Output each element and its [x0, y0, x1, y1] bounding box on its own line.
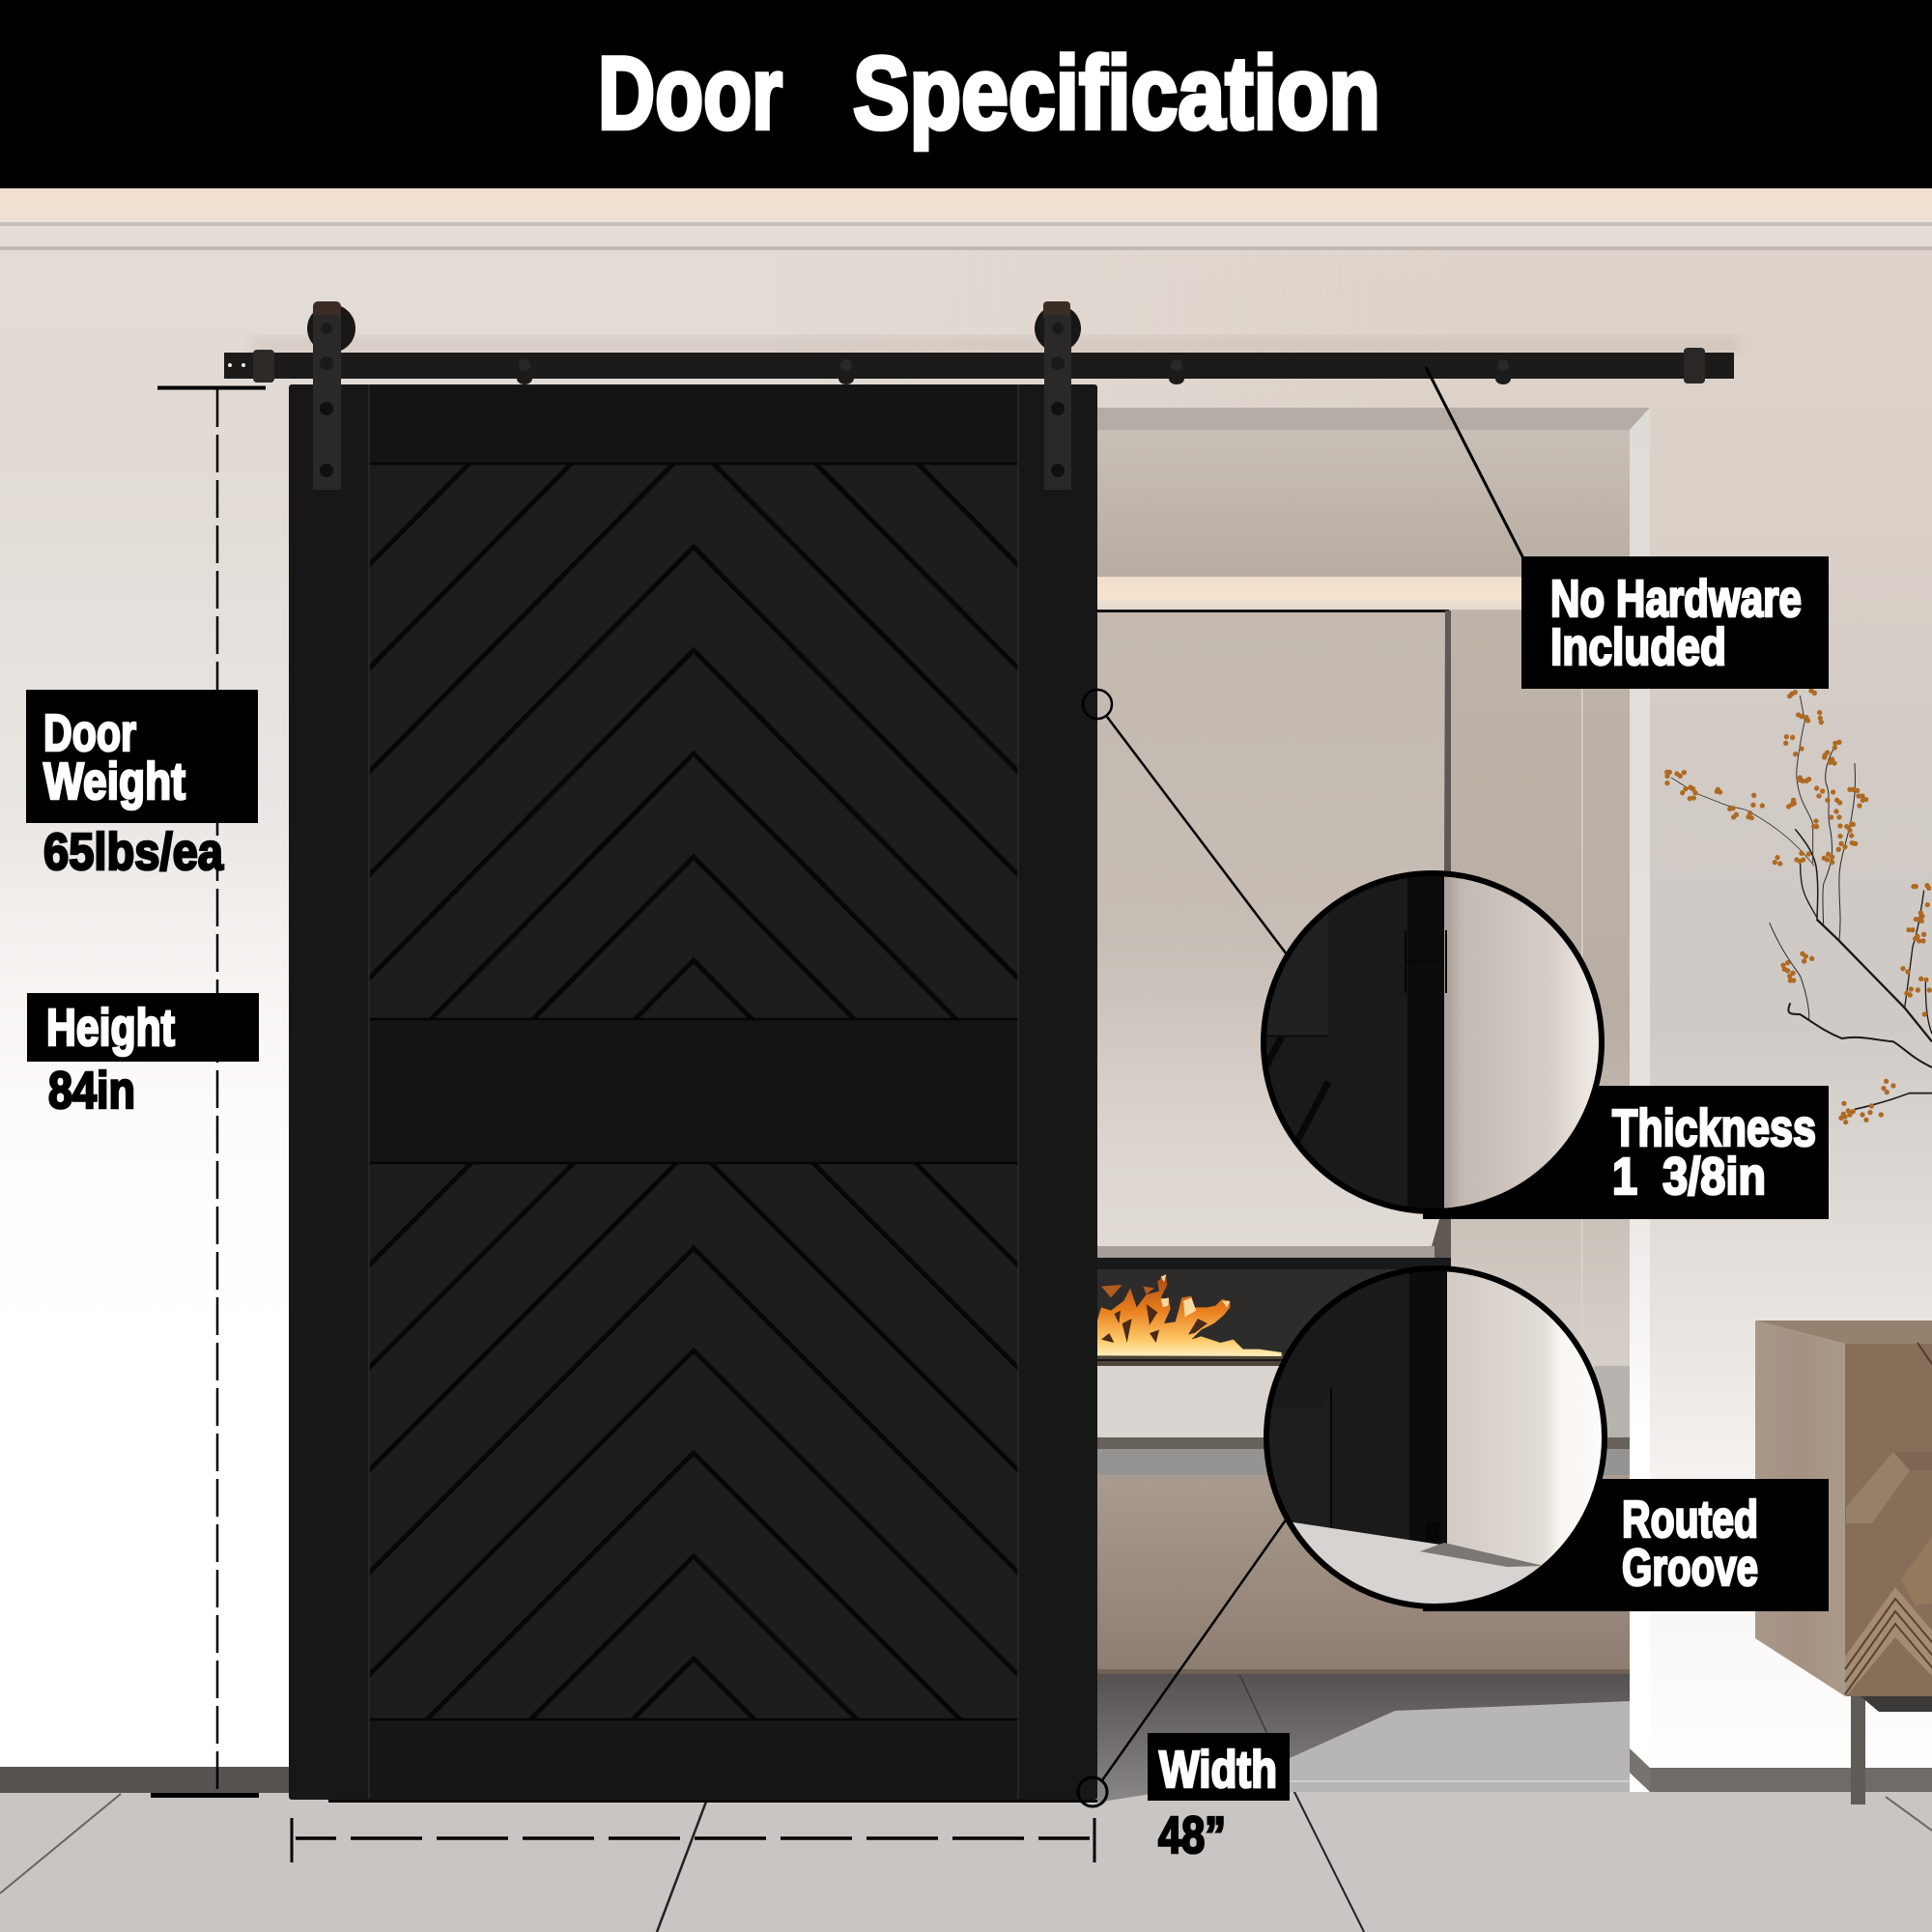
title band: Specification: [853, 35, 1380, 151]
doorway interior view: [1096, 408, 1932, 1803]
plant branches with berries: [1664, 688, 1932, 1124]
callout: thickness: Thickness: [1612, 1099, 1816, 1157]
callout: door weight: Door: [43, 704, 136, 762]
callout: routed groove: [1423, 1479, 1829, 1611]
background: wall and ceiling: [0, 188, 1932, 1631]
callout: height: [27, 993, 259, 1120]
title band: [0, 0, 1932, 188]
track stops: [253, 348, 1705, 384]
magnifier: routed groove detail: [1264, 1265, 1607, 1609]
width dimension line: [292, 1818, 1094, 1862]
callout: door weight: 65lbs/ea: [43, 823, 224, 881]
callout: door weight: Weight: [43, 753, 185, 810]
right hanger: [1035, 301, 1081, 490]
callout: routed groove: Groove: [1622, 1539, 1758, 1597]
callout: door weight: [26, 690, 258, 881]
callout: no hardware included: No Hardware: [1550, 570, 1802, 628]
callout: height: 84in: [48, 1062, 135, 1120]
title band: Door: [598, 35, 782, 151]
cabinet: [1755, 1321, 1932, 1804]
lower chevron panel: [369, 1164, 1018, 1719]
callout: width: Width: [1159, 1741, 1277, 1799]
leader: groove marker: [1078, 1519, 1287, 1806]
leader: thickness marker: [1083, 690, 1287, 954]
callout: routed groove: Routed: [1622, 1491, 1758, 1548]
callout: width: [1148, 1733, 1290, 1864]
callout: height: Height: [46, 999, 175, 1057]
upper chevron panel: [369, 465, 1018, 1018]
floor: [0, 1767, 1932, 1932]
callout: thickness: [1423, 1086, 1829, 1219]
callout: width: 48”: [1158, 1806, 1226, 1864]
hardware: sliding track with hangers: [224, 301, 1734, 490]
callout: no hardware included: [1426, 367, 1829, 689]
left hanger: [307, 301, 355, 490]
height dimension line: [151, 388, 266, 1798]
fireplace flames: [1097, 1273, 1282, 1356]
callout: no hardware included: Included: [1550, 618, 1726, 676]
magnifier: door thickness detail: [1256, 869, 1623, 1217]
callout: thickness: 1 3/8in: [1612, 1148, 1766, 1206]
barn door: [289, 384, 1097, 1803]
track bar: [224, 353, 1734, 379]
door rails: [369, 384, 1018, 1799]
rail shadow: [251, 336, 1739, 354]
